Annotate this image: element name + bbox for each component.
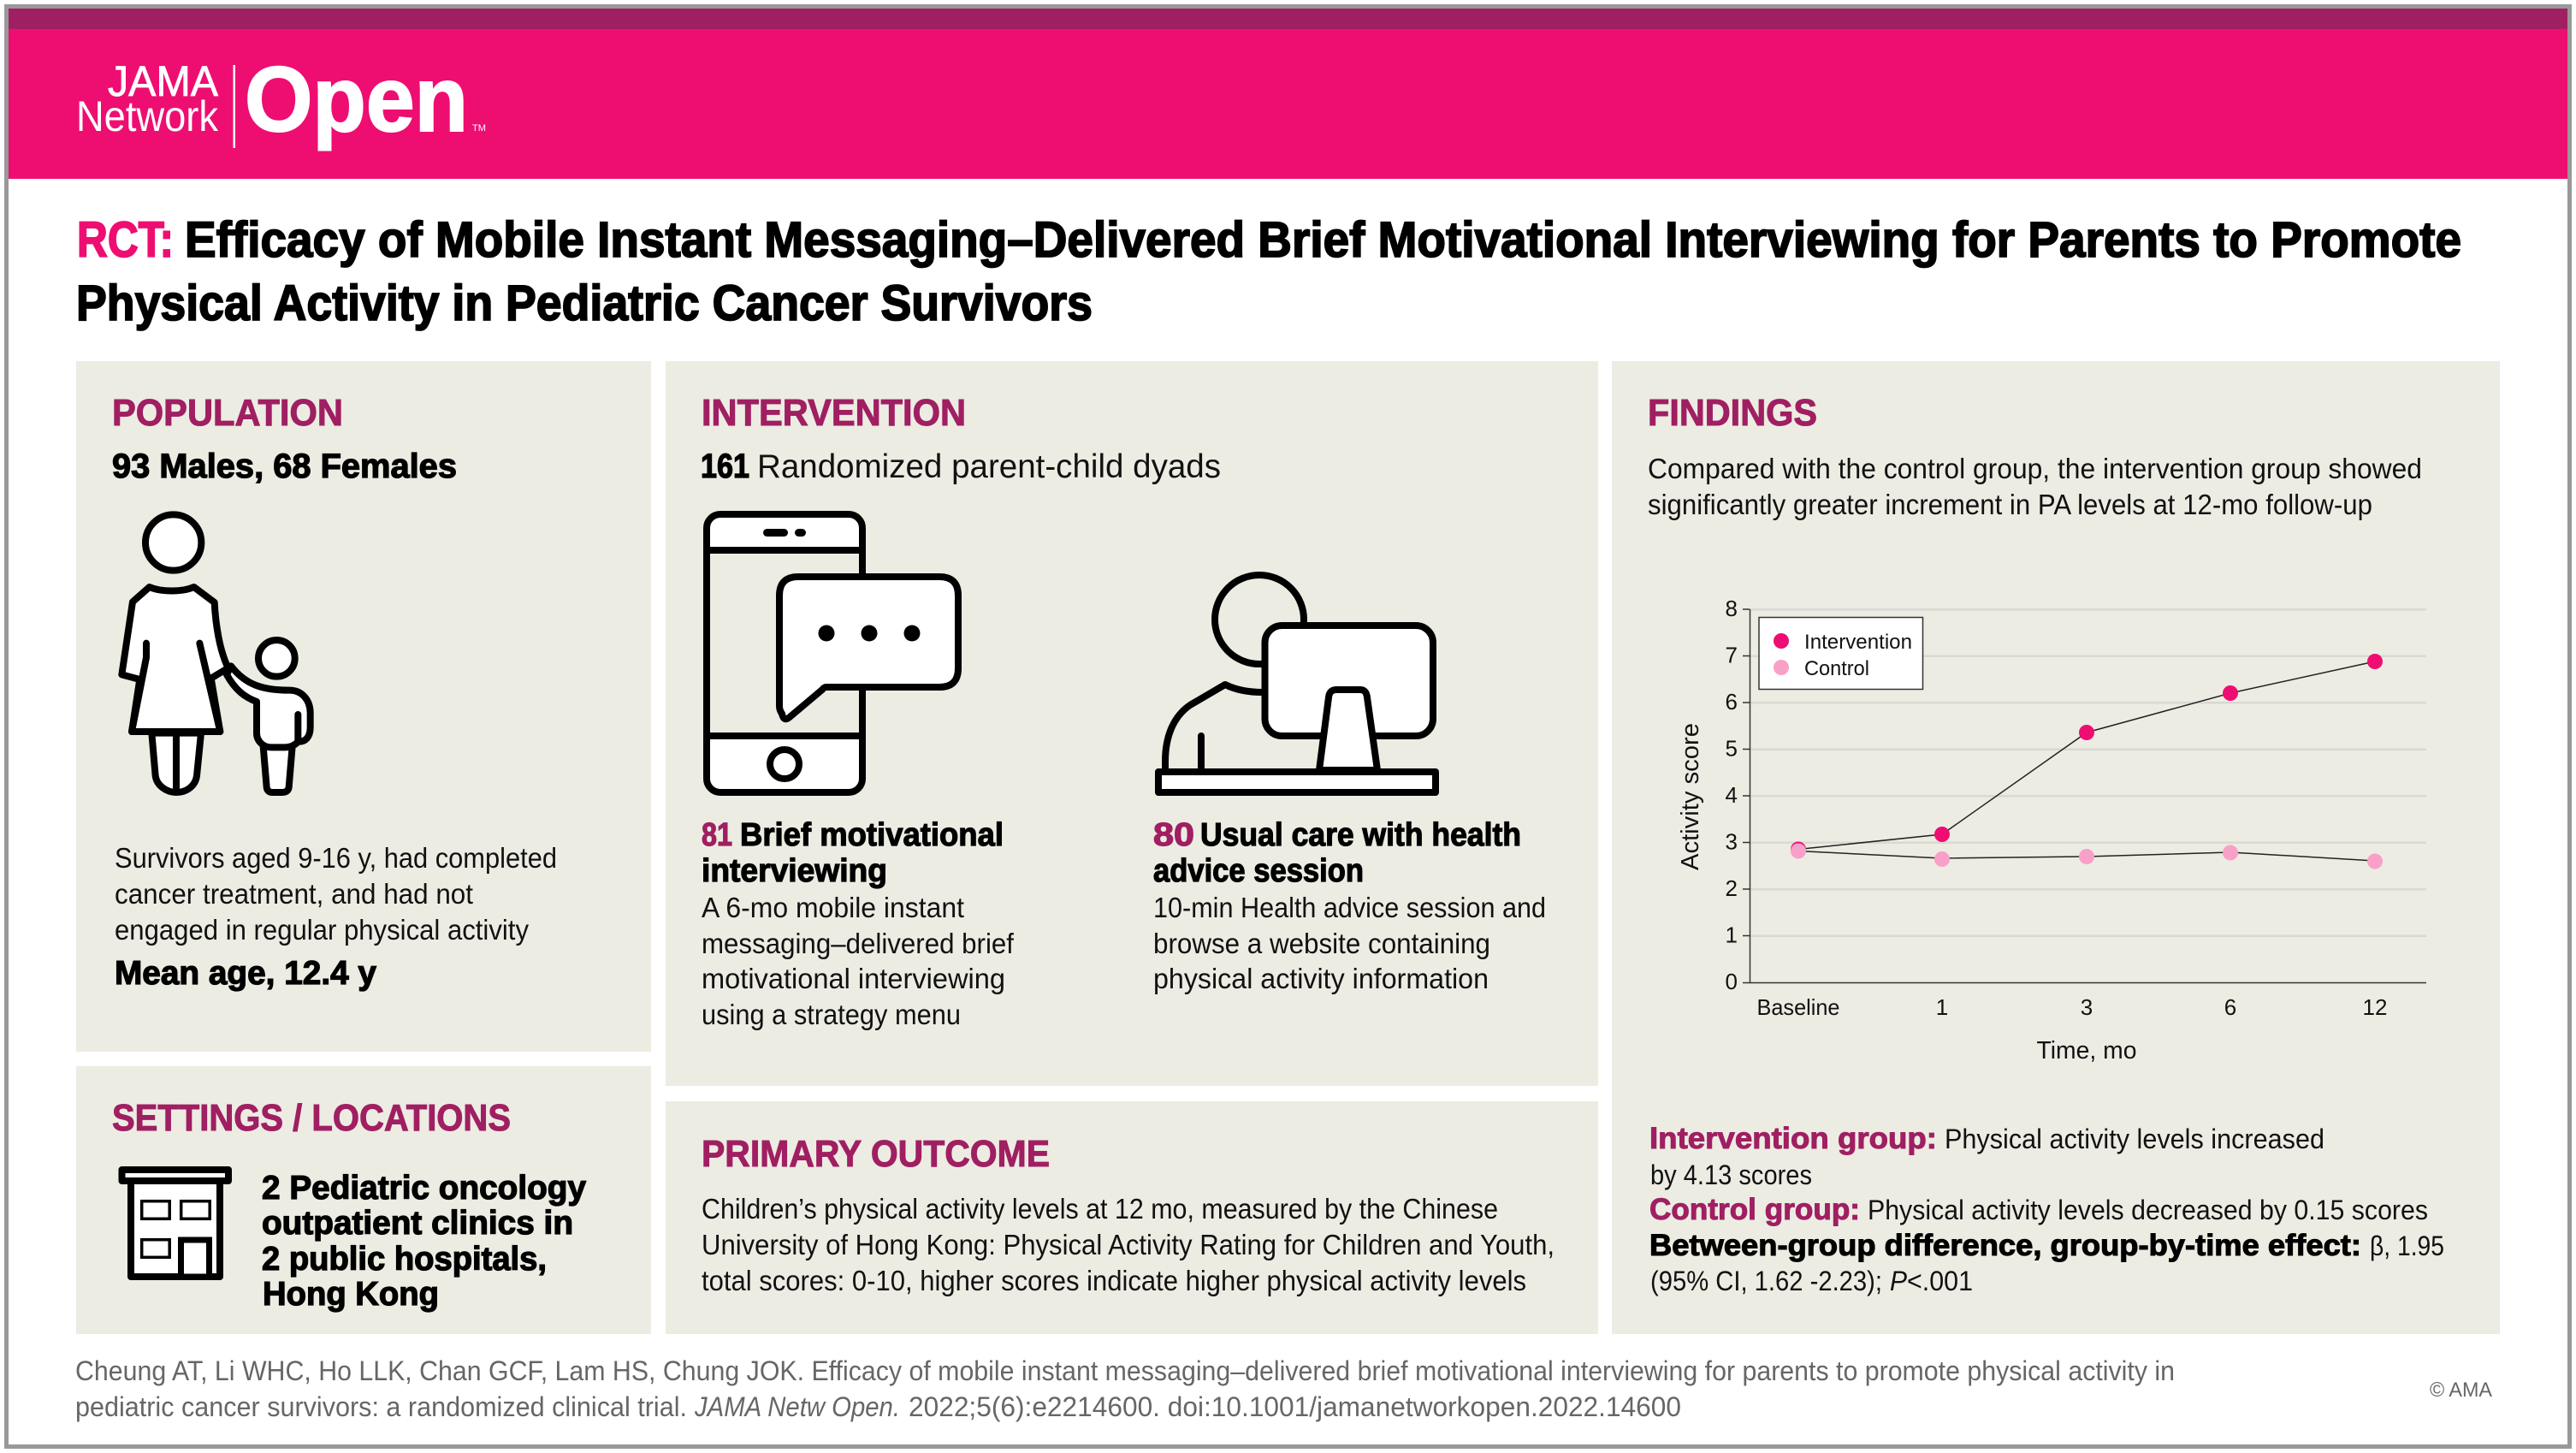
y axis tick labels: 0 <box>1726 969 1738 994</box>
findings summary <box>1648 454 2422 521</box>
heading: intervention: INTERVENTION <box>702 392 966 434</box>
series: intervention <box>1791 654 2383 857</box>
logo: JAMA Network Open: JAMA <box>108 57 219 105</box>
heading: findings: FINDINGS <box>1648 392 1817 434</box>
panel: population <box>76 361 651 1052</box>
citation <box>75 1355 2175 1422</box>
panel: settings and locations <box>76 1066 651 1334</box>
y axis tick labels: 8 <box>1726 596 1738 621</box>
y axis tick labels: 6 <box>1726 689 1738 715</box>
settings text: Hong Kong <box>263 1276 439 1313</box>
x axis tick labels: 12 <box>2363 994 2387 1020</box>
arm: brief motivational interviewing: using a strategy menu <box>702 999 961 1031</box>
findings: group results: Intervention group: <box>1649 1121 1937 1155</box>
logo: JAMA Network Open <box>76 47 486 151</box>
title: Physical Activity in Pediatric Cancer Survivors <box>76 276 1093 331</box>
arm: brief motivational interviewing: A 6-mo mobile instant <box>702 893 965 924</box>
logo: JAMA Network Open: Open <box>245 47 468 151</box>
y axis tick labels: 3 <box>1726 828 1738 854</box>
logo: JAMA Network Open: Network <box>76 92 219 140</box>
findings: group results <box>1649 1121 2444 1296</box>
settings text: outpatient clinics in <box>262 1205 573 1242</box>
findings: group results: Control group: <box>1649 1192 1860 1226</box>
heading: population: POPULATION <box>112 392 343 434</box>
arm: brief motivational interviewing <box>702 817 1015 1031</box>
x axis tick labels: Baseline <box>1757 994 1839 1020</box>
mean age: Mean age, 12.4 y <box>115 955 376 992</box>
findings: group results: (95% CI, 1.62 -2.23); <box>1650 1266 1882 1296</box>
citation: 2022;5(6):e2214600. doi:10.1001/jamanetworkopen.2022.14600 <box>909 1391 1681 1422</box>
arm: brief motivational interviewing: motivational interviewing <box>702 964 1005 995</box>
line chart: activity score over time <box>1677 596 2426 1065</box>
population description: engaged in regular physical activity <box>115 915 529 946</box>
panel: intervention <box>666 361 1598 1086</box>
population description: cancer treatment, and had not <box>115 879 474 910</box>
findings: group results: Physical activity levels increased <box>1945 1124 2324 1154</box>
heading: primary outcome: PRIMARY OUTCOME <box>702 1133 1050 1175</box>
findings: group results: Physical activity levels decreased by 0.15 scores <box>1868 1195 2428 1225</box>
y axis tick labels: 1 <box>1726 922 1738 948</box>
chart legend <box>1759 618 1923 690</box>
arm: usual care: 10-min Health advice session and <box>1153 893 1546 924</box>
y axis title: Activity score <box>1677 723 1704 870</box>
x axis tick labels: 6 <box>2224 994 2236 1020</box>
y axis tick labels: 7 <box>1726 642 1738 667</box>
arm: brief motivational interviewing: interviewing <box>702 853 887 889</box>
randomized dyads: Randomized parent-child dyads <box>757 448 1221 485</box>
chart legend: Intervention <box>1804 631 1912 654</box>
citation: pediatric cancer survivors: a randomized clinical trial. <box>75 1391 687 1422</box>
arm: usual care: physical activity information <box>1153 964 1489 995</box>
y axis tick labels: 4 <box>1726 782 1738 808</box>
logo: JAMA Network Open: TM <box>472 123 486 133</box>
population counts: 93 Males, 68 Females <box>112 448 457 485</box>
settings text <box>262 1170 586 1313</box>
icon: person at monitor <box>1158 575 1436 792</box>
settings text: 2 public hospitals, <box>262 1241 547 1278</box>
series: control <box>1791 844 2383 869</box>
arm: usual care: browse a website containing <box>1153 928 1490 960</box>
population description: Survivors aged 9-16 y, had completed <box>115 843 557 875</box>
y axis tick labels <box>1726 596 1738 994</box>
arm: brief motivational interviewing: 81 <box>702 817 732 853</box>
findings: group results: P <box>1890 1266 1907 1296</box>
outcome description: Children’s physical activity levels at 12 mo, measured by the Chinese <box>702 1194 1498 1225</box>
arm: usual care: advice session <box>1153 853 1364 889</box>
title <box>76 212 2461 331</box>
findings: group results: <.001 <box>1907 1266 1973 1296</box>
randomized dyads: 161 <box>701 448 749 485</box>
x axis tick labels: 3 <box>2081 994 2093 1020</box>
arm: usual care: Usual care with health <box>1200 817 1521 853</box>
title: Efficacy of Mobile Instant Messaging–Delivered Brief Motivational Interviewing for Parents to Promote <box>185 212 2461 268</box>
citation: JAMA Netw Open. <box>694 1391 900 1422</box>
arm: brief motivational interviewing: messaging–delivered brief <box>702 928 1015 960</box>
findings summary: Compared with the control group, the intervention group showed <box>1648 454 2422 485</box>
findings: group results: by 4.13 scores <box>1650 1159 1812 1190</box>
findings: group results: β, 1.95 <box>2370 1231 2444 1261</box>
panel: primary outcome <box>666 1101 1598 1334</box>
x axis tick labels <box>1757 994 2387 1020</box>
icon: building <box>121 1170 228 1277</box>
panel: findings <box>1612 361 2500 1334</box>
outcome description: University of Hong Kong: Physical Activity Rating for Children and Youth, <box>702 1230 1554 1261</box>
x axis title: Time, mo <box>2036 1037 2137 1065</box>
outcome description: total scores: 0-10, higher scores indicate higher physical activity levels <box>702 1266 1526 1297</box>
outcome description <box>702 1194 1554 1297</box>
x axis tick labels: 1 <box>1936 994 1948 1020</box>
header banner <box>9 9 2567 179</box>
heading: settings: SETTINGS / LOCATIONS <box>112 1097 511 1139</box>
icon: parent and child <box>121 514 311 792</box>
settings text: 2 Pediatric oncology <box>262 1170 586 1207</box>
arm: usual care <box>1153 817 1546 995</box>
arm: usual care: 80 <box>1153 817 1194 853</box>
y axis tick labels: 2 <box>1726 875 1738 901</box>
icon: phone with chat bubble <box>707 514 958 792</box>
chart legend: Control <box>1804 657 1869 680</box>
findings summary: significantly greater increment in PA levels at 12-mo follow-up <box>1648 489 2372 521</box>
arm: brief motivational interviewing: Brief motivational <box>740 817 1004 853</box>
copyright: © AMA <box>2430 1379 2492 1402</box>
y axis tick labels: 5 <box>1726 736 1738 762</box>
title: RCT: <box>77 212 174 268</box>
citation: Cheung AT, Li WHC, Ho LLK, Chan GCF, Lam HS, Chung JOK. Efficacy of mobile instant messaging–delivered brief motivational interviewing for parents to promote physical activity in <box>75 1355 2175 1386</box>
population description <box>115 843 557 946</box>
findings: group results: Between-group difference, group-by-time effect: <box>1649 1228 2361 1262</box>
